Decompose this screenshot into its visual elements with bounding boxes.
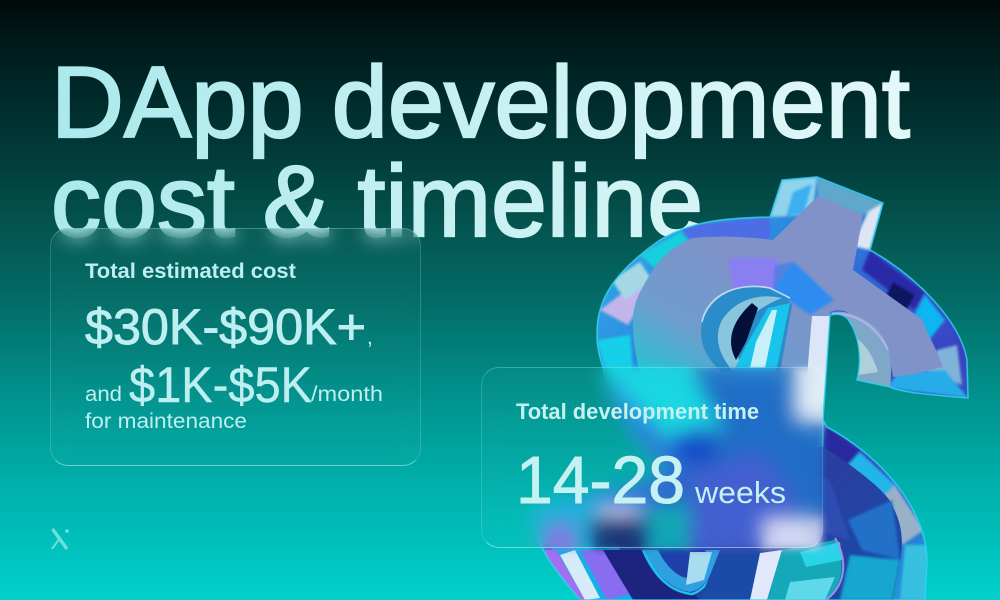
lower-left arm bevel — [530, 500, 700, 600]
illustration: glass dollar sign — [527, 176, 969, 600]
cost range: $30K-$90K+ — [85, 299, 366, 355]
lower bar and hook — [700, 538, 843, 600]
title: cost & timeline — [51, 146, 703, 258]
lower face — [620, 446, 902, 600]
cost text block — [85, 260, 383, 433]
comma: , — [367, 326, 373, 349]
time range: 14-28 — [516, 443, 685, 518]
vertical bar highlight — [807, 316, 830, 405]
blurred glow patches beneath the card — [535, 368, 826, 548]
right hook — [830, 312, 891, 387]
upper hole — [701, 286, 792, 372]
cost heading: Total estimated cost — [85, 260, 296, 283]
lower U hook — [643, 550, 721, 594]
time text block — [516, 399, 786, 518]
and label: and — [85, 383, 122, 406]
title: DApp development — [51, 47, 910, 159]
glass rim highlight — [535, 177, 968, 600]
weeks unit: weeks — [694, 475, 786, 510]
panel: total development time — [481, 367, 823, 548]
maintenance range: $1K-$5K — [129, 357, 312, 413]
bevel base — [530, 170, 975, 600]
time heading: Total development time — [516, 399, 759, 424]
upper face — [633, 196, 943, 470]
panel: total estimated cost — [50, 228, 421, 466]
face facets — [728, 258, 900, 600]
per month: /month — [311, 382, 383, 406]
for maintenance: for maintenance — [85, 409, 247, 433]
bevel colour segments — [597, 177, 968, 600]
